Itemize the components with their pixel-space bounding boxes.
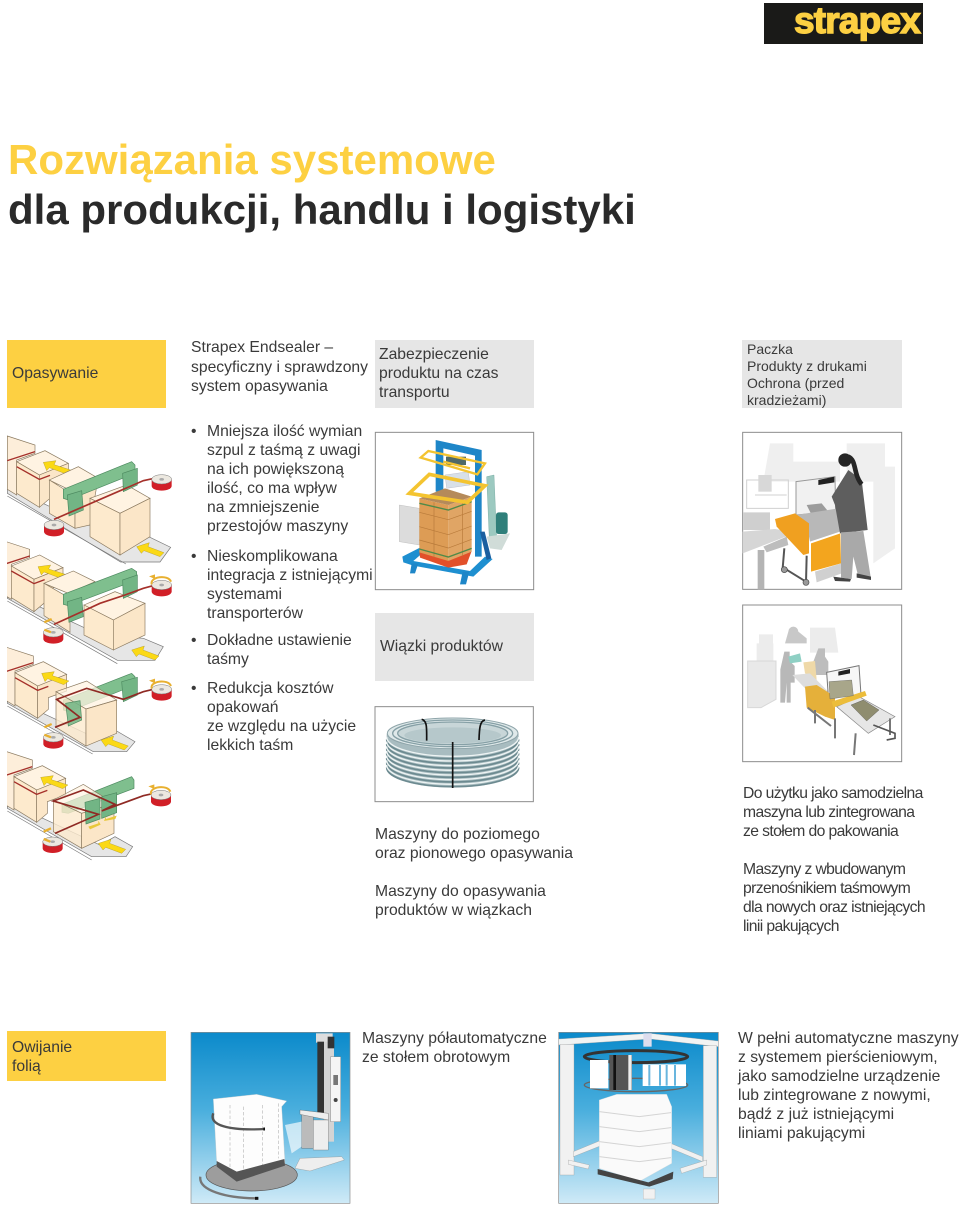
category label: Owijanie folią: folią	[12, 1058, 41, 1075]
benefit list: na zmniejszenie	[207, 499, 320, 516]
text block: fully automatic machines: bądź z już istniejącymi	[738, 1106, 894, 1123]
heading box: Zabezpieczenie produktu: Zabezpieczenie	[379, 346, 489, 363]
heading box: Zabezpieczenie produktu: produktu na czas	[379, 365, 498, 382]
benefit list: ze względu na użycie	[207, 718, 356, 735]
text block: horizontal and vertical strapping: Maszyny do poziomego	[375, 826, 540, 843]
text block: fully automatic machines: z systemem pierścieniowym,	[738, 1049, 938, 1066]
benefit list: •	[191, 680, 196, 697]
diagram: strap step 1	[7, 436, 172, 564]
benefit list: szpul z taśmą z uwagi	[207, 442, 360, 459]
title: dla produkcji, handlu i logistyki	[8, 186, 636, 233]
heading box: Wiązki produktów	[375, 613, 534, 681]
heading box: Paczka: Paczka	[747, 341, 793, 357]
text block: Strapex Endsealer intro: system opasywania	[191, 378, 328, 395]
heading box: Paczka: kradzieżami)	[747, 392, 826, 408]
benefit list: Dokładne ustawienie	[207, 632, 352, 649]
diagram: strap step 3	[7, 647, 172, 754]
benefit list: taśmy	[207, 651, 249, 668]
benefit list	[191, 423, 373, 754]
image: ring wrapping machine	[558, 1032, 719, 1204]
text block: Strapex Endsealer intro: specyficzny i sprawdzony	[191, 358, 368, 376]
logo: strapex: strapex	[794, 0, 920, 41]
benefit list: systemami	[207, 586, 282, 603]
text block: standalone and integrated machines: ze stołem do pakowania	[743, 823, 898, 840]
image: strapped coil	[374, 706, 534, 802]
text block: fully automatic machines: liniami pakującymi	[738, 1125, 865, 1142]
benefit list: ilość, co ma wpływ	[207, 480, 337, 497]
benefit list: Nieskomplikowana	[207, 548, 338, 565]
text block: semi-automatic machines: ze stołem obrotowym	[362, 1049, 510, 1066]
text block: fully automatic machines: W pełni automatyczne maszyny	[738, 1030, 959, 1047]
text block: standalone and integrated machines	[743, 785, 925, 935]
benefit list: Redukcja kosztów	[207, 680, 333, 697]
text block: fully automatic machines: lub zintegrowane z nowymi,	[738, 1087, 931, 1104]
heading box: Zabezpieczenie produktu: transportu	[379, 384, 450, 401]
text block: standalone and integrated machines: przenośnikiem taśmowym	[743, 880, 910, 897]
title: Rozwiązania systemowe	[8, 136, 496, 183]
benefit list: •	[191, 632, 196, 649]
image: tabletop strapping machine with operator	[742, 432, 902, 590]
heading box: Zabezpieczenie produktu	[375, 340, 534, 408]
benefit list: •	[191, 423, 196, 440]
category label: Owijanie folią	[7, 1031, 166, 1081]
image: turntable wrapping machine	[190, 1032, 350, 1204]
text block: fully automatic machines	[738, 1030, 959, 1142]
text block: Strapex Endsealer intro	[191, 339, 368, 395]
text block: standalone and integrated machines: Maszyny z wbudowanym	[743, 861, 905, 878]
image: pallet strapping machine	[374, 432, 534, 590]
image: conveyor strapping line	[742, 604, 902, 762]
text block: horizontal and vertical strapping: Maszyny do opasywania	[375, 883, 546, 900]
benefit list: przestojów maszyny	[207, 518, 348, 535]
benefit list: lekkich taśm	[207, 737, 293, 754]
benefit list: •	[191, 548, 196, 565]
text block: Strapex Endsealer intro: Strapex Endsealer –	[191, 339, 333, 356]
text block: fully automatic machines: jako samodzielne urządzenie	[738, 1068, 940, 1085]
text block: standalone and integrated machines: Do użytku jako samodzielna	[743, 785, 923, 802]
heading box: Paczka: Produkty z drukami	[747, 358, 867, 374]
diagram: strap step 4	[7, 751, 172, 860]
text block: semi-automatic machines	[362, 1030, 547, 1066]
text block: standalone and integrated machines: maszyna lub zintegrowana	[743, 804, 914, 821]
heading box: Paczka	[742, 340, 902, 408]
text block: standalone and integrated machines: dla nowych oraz istniejących	[743, 899, 925, 916]
text block: horizontal and vertical strapping: oraz pionowego opasywania	[375, 845, 573, 862]
text block: horizontal and vertical strapping	[375, 826, 573, 919]
diagram: strap step 2	[7, 542, 172, 664]
text block: horizontal and vertical strapping: produktów w wiązkach	[375, 902, 532, 919]
text block: semi-automatic machines: Maszyny półautomatyczne	[362, 1030, 547, 1047]
category label: Owijanie folią: Owijanie	[12, 1039, 72, 1056]
benefit list: Mniejsza ilość wymian	[207, 423, 362, 440]
heading box: Paczka: Ochrona (przed	[747, 375, 844, 391]
benefit list: opakowań	[207, 699, 279, 716]
category label: Opasywanie: Opasywanie	[12, 365, 98, 382]
logo: strapex	[764, 3, 923, 44]
benefit list: transporterów	[207, 605, 303, 622]
benefit list: integracja z istniejącymi	[207, 567, 373, 584]
category label: Opasywanie	[7, 340, 166, 408]
benefit list: na ich powiększoną	[207, 461, 344, 478]
title	[8, 136, 636, 233]
heading box: Wiązki produktów: Wiązki produktów	[380, 638, 503, 655]
text block: standalone and integrated machines: linii pakujących	[743, 918, 839, 935]
